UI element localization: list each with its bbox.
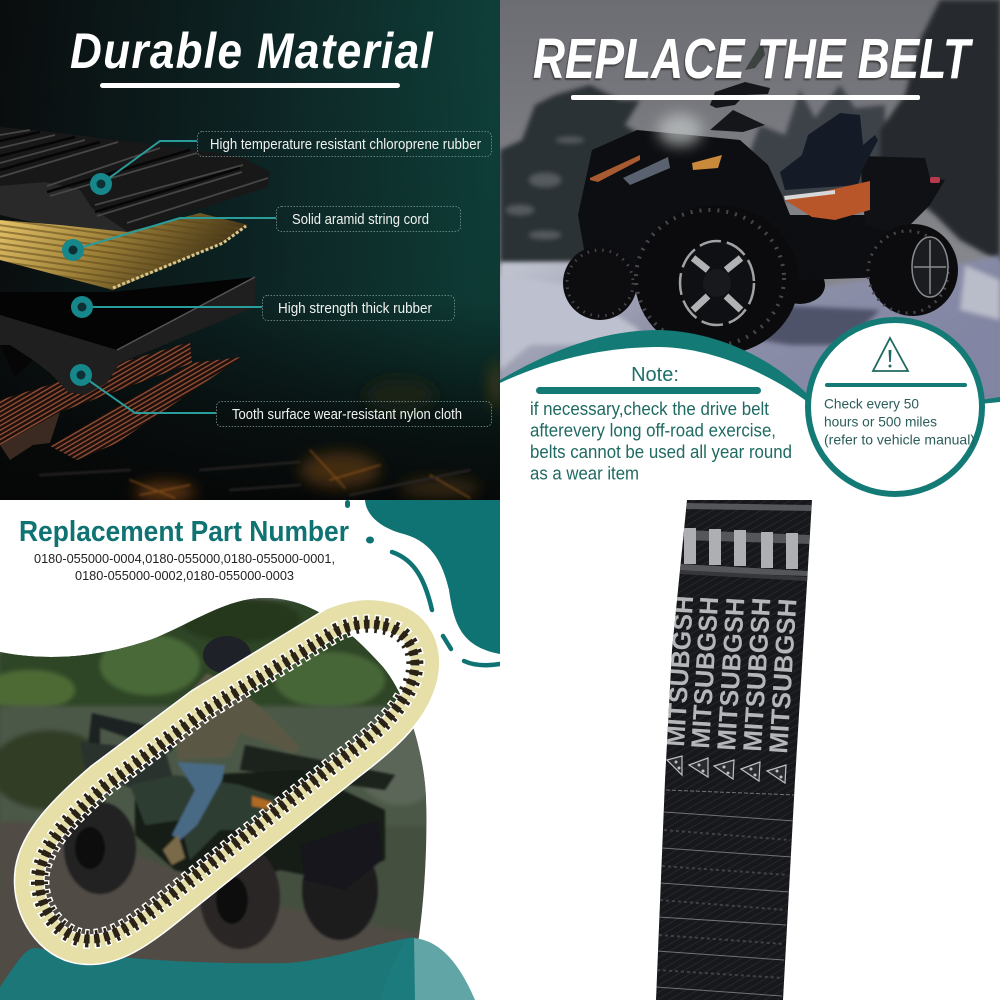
headlight glare bbox=[658, 114, 702, 146]
label: nylon cloth bbox=[216, 402, 492, 426]
front fender bbox=[130, 775, 285, 860]
marker: nylon cloth bbox=[70, 364, 92, 386]
marker: aramid cord bbox=[62, 239, 84, 261]
handlebars bbox=[710, 82, 770, 132]
printed brand text: MITSUBGSH bbox=[737, 597, 776, 752]
far rear wheel bbox=[794, 279, 825, 304]
rear fender bbox=[80, 742, 175, 790]
belt strip bbox=[640, 500, 820, 1000]
ATV and rider bbox=[64, 636, 395, 949]
illustration: ATV bbox=[563, 42, 958, 355]
text: check interval: (refer to vehicle manual) bbox=[824, 432, 975, 448]
forest bbox=[0, 598, 500, 710]
right wheel bbox=[302, 840, 378, 940]
front wheel bbox=[200, 845, 280, 949]
left front wheel bbox=[563, 246, 637, 320]
rider legs bbox=[172, 762, 225, 840]
panel: replacement part number bbox=[0, 500, 500, 1000]
belt layer: nylon cloth bbox=[0, 342, 242, 460]
divider: callout bar bbox=[825, 383, 967, 387]
title: replacement part number: Replacement Part Number bbox=[19, 516, 349, 548]
label: aramid cord: Solid aramid string cord bbox=[292, 212, 429, 228]
orange reflector bbox=[252, 796, 272, 810]
white printed bars bbox=[684, 528, 798, 569]
snowy forest backdrop bbox=[500, 0, 1000, 265]
belt layer: chloroprene rubber bbox=[0, 127, 270, 235]
panel: durable material bbox=[0, 0, 502, 502]
front cowl trim bbox=[590, 155, 640, 182]
text: note body: belts cannot be used all year round bbox=[530, 441, 792, 462]
main body bbox=[578, 130, 888, 280]
text: check interval: Check every 50 bbox=[824, 396, 919, 412]
front grille bbox=[300, 820, 382, 890]
centre trees bbox=[745, 85, 885, 200]
text: part numbers: 0180-055000-0004,0180-055000,0180-055000-0001, bbox=[34, 552, 335, 566]
panel: belt close-up bbox=[640, 500, 820, 1000]
text: check interval bbox=[824, 396, 975, 448]
title: durable material bbox=[70, 32, 434, 88]
amber marker bbox=[692, 155, 722, 170]
label: aramid cord bbox=[276, 206, 460, 232]
printed brand text: MITSUBGSH bbox=[685, 596, 724, 749]
printed brand text: MITSUBGSH bbox=[660, 595, 699, 747]
woven hatch highlights bbox=[657, 830, 790, 978]
printed brand text: MITSUBGSH bbox=[763, 598, 802, 754]
tail light bbox=[930, 177, 940, 183]
teal blob bottom light bbox=[380, 938, 475, 1000]
callout: maintenance interval bbox=[808, 320, 982, 494]
callout leader lines bbox=[73, 141, 276, 413]
gravel shore bbox=[0, 822, 430, 1000]
orange side panel bbox=[785, 181, 870, 220]
printed brand text: MITSUBGSH bbox=[711, 597, 750, 751]
rider torso bbox=[177, 673, 300, 760]
text: note body: if necessary,check the drive belt bbox=[530, 398, 769, 419]
top woven bands bbox=[680, 503, 812, 581]
seat bbox=[780, 113, 878, 190]
teal blob bottom dark bbox=[0, 937, 415, 1000]
helmet bbox=[203, 636, 251, 674]
text: note body: as a wear item bbox=[530, 462, 639, 484]
snow ground bbox=[500, 255, 1000, 400]
printed shield icons bbox=[667, 756, 786, 783]
decorative teal droplets bbox=[345, 500, 500, 665]
panel: replace the belt bbox=[500, 0, 1000, 500]
label: nylon cloth: Tooth surface wear-resistant nylon cloth bbox=[232, 407, 462, 423]
marker: chloroprene rubber bbox=[90, 173, 112, 195]
divider: note bar bbox=[536, 387, 761, 394]
label: chloroprene rubber bbox=[198, 132, 492, 156]
left wheel bbox=[64, 802, 136, 894]
rear wheel bbox=[868, 224, 958, 316]
left spruce bbox=[500, 85, 650, 265]
text: note body: afterevery long off-road exercise, bbox=[530, 420, 776, 440]
fire and charred wood background bbox=[40, 361, 502, 502]
teal blob top right bbox=[365, 500, 500, 654]
label: chloroprene rubber: High temperature resistant chloroprene rubber bbox=[210, 137, 481, 153]
photo: rider on ATV at riverbank bbox=[0, 590, 500, 1000]
boot bbox=[163, 835, 185, 865]
text: part numbers bbox=[34, 552, 335, 583]
label: thick rubber: High strength thick rubber bbox=[278, 301, 432, 317]
text: note body bbox=[530, 398, 792, 484]
river water bbox=[0, 706, 500, 826]
front rack bbox=[240, 745, 395, 790]
belt layer: thick rubber bbox=[0, 277, 255, 395]
body bbox=[135, 770, 385, 885]
illustration: drive belt loop bbox=[29, 614, 425, 950]
snow flecks on spruce bbox=[506, 137, 584, 239]
icon: warning triangle bbox=[873, 338, 908, 371]
belt layer: aramid cord bbox=[0, 213, 248, 290]
text: part numbers: 0180-055000-0002,0180-055000-0003 bbox=[75, 569, 294, 583]
lower belt stitching bbox=[656, 790, 796, 996]
heading: note: Note: bbox=[631, 364, 679, 386]
label: thick rubber bbox=[262, 296, 454, 320]
title: durable material: Durable Material bbox=[70, 23, 434, 79]
printed brand text bbox=[660, 595, 802, 754]
text: check interval: hours or 500 miles bbox=[824, 414, 937, 430]
note panel with teal arc bbox=[500, 330, 1000, 500]
main front wheel bbox=[635, 205, 799, 355]
right forest bbox=[880, 0, 1000, 262]
rear body bbox=[860, 156, 945, 235]
headlight bbox=[623, 157, 670, 185]
marker: thick rubber bbox=[71, 296, 93, 318]
rear rack bbox=[88, 713, 180, 752]
mirror bbox=[745, 46, 765, 70]
